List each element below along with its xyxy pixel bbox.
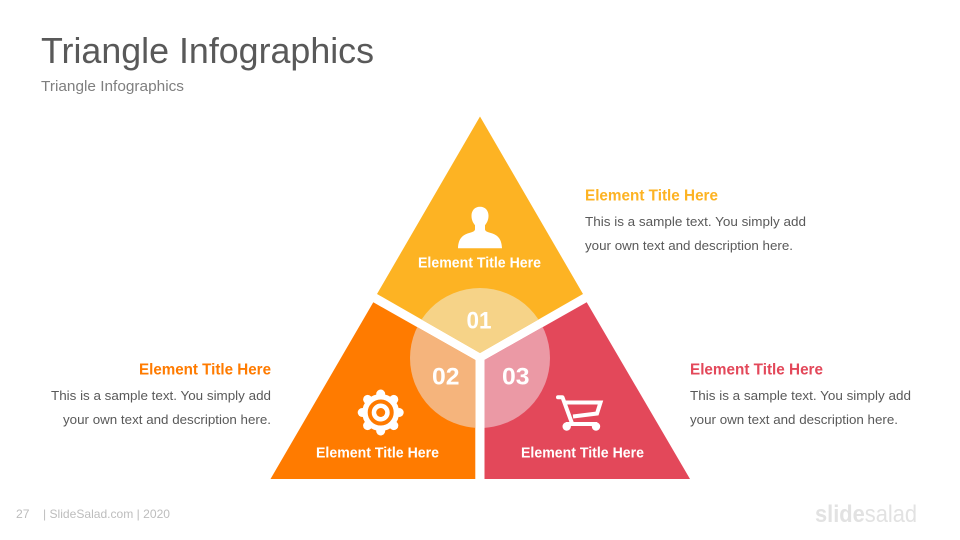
footer text: | SlideSalad.com | 2020 — [43, 507, 170, 521]
text block: element 01: This is a sample text. You simply add — [585, 214, 806, 229]
icon: user — [458, 207, 502, 248]
text block: element 01: your own text and description here. — [585, 238, 793, 253]
label: segment 01 title: Element Title Here — [418, 256, 541, 272]
text block: element 02: This is a sample text. You simply add — [51, 388, 271, 403]
text block: element 03: your own text and description here. — [690, 412, 898, 427]
label: segment 03 title: Element Title Here — [521, 446, 644, 462]
label: segment 02 title: Element Title Here — [316, 446, 439, 462]
panel: triangle segment 02 — [270, 302, 476, 479]
number 03: 03 — [502, 364, 530, 390]
circle overlay 02 — [410, 327, 476, 428]
subtitle: Triangle Infographics — [41, 78, 184, 95]
text block: element 02 — [51, 362, 271, 427]
text block: element 03: Element Title Here — [690, 362, 823, 378]
number 01: 01 — [466, 308, 492, 334]
title: Triangle Infographics — [41, 30, 374, 71]
panel: triangle segment 03 — [484, 302, 690, 479]
text block: element 03 — [690, 362, 911, 427]
panel: triangle segment 01 — [377, 116, 583, 353]
text block: element 01: Element Title Here — [585, 188, 718, 204]
circle overlay 01 — [422, 288, 538, 353]
text block: element 02: Element Title Here — [139, 362, 271, 378]
number 02: 02 — [432, 364, 460, 390]
icon: shopping cart — [558, 397, 600, 431]
logo: slidesalad — [815, 501, 917, 528]
text block: element 01 — [585, 188, 806, 253]
page number: 27 — [16, 507, 30, 521]
text block: element 03: This is a sample text. You simply add — [690, 388, 911, 403]
text block: element 02: your own text and description here. — [63, 412, 271, 427]
icon: gear — [358, 390, 404, 436]
circle overlay 03 — [484, 327, 550, 428]
